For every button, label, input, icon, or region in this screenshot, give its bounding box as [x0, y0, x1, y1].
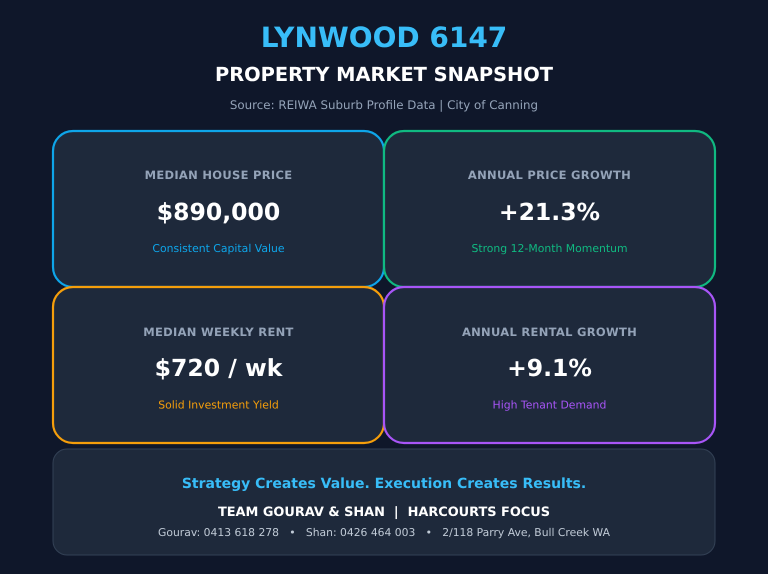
- source note: Source: REIWA Suburb Profile Data | City of Canning: [230, 98, 538, 112]
- panel: annual rental growth: +9.1%: [507, 354, 592, 382]
- panel: median house price: Consistent Capital Value: [152, 242, 285, 255]
- panel: median house price: MEDIAN HOUSE PRICE: [145, 168, 292, 182]
- title: LYNWOOD 6147: [261, 21, 507, 54]
- panel: annual rental growth: ANNUAL RENTAL GROWTH: [462, 325, 637, 339]
- panel: median weekly rent: MEDIAN WEEKLY RENT: [143, 325, 294, 339]
- panel: median weekly rent: $720 / wk: [155, 354, 284, 382]
- subtitle: PROPERTY MARKET SNAPSHOT: [215, 63, 554, 86]
- panel: annual rental growth: [384, 287, 715, 443]
- panel: footer: Strategy Creates Value. Execution Creates Results.: [182, 476, 586, 492]
- panel: annual price growth: +21.3%: [499, 198, 600, 226]
- panel: annual price growth: Strong 12-Month Momentum: [471, 242, 628, 255]
- panel: median house price: [53, 131, 384, 287]
- panel: annual price growth: ANNUAL PRICE GROWTH: [468, 168, 631, 182]
- panel: annual price growth: [384, 131, 715, 287]
- panel: annual rental growth: High Tenant Demand: [493, 398, 606, 412]
- panel: footer: [53, 449, 715, 555]
- panel: footer: TEAM GOURAV & SHAN | HARCOURTS FOCUS: [218, 505, 550, 520]
- panel: footer: Gourav: 0413 618 278 • Shan: 0426 464 003 • 2/118 Parry Ave, Bull Creek WA: [158, 526, 611, 539]
- panel: median house price: $890,000: [157, 198, 280, 226]
- panel: median weekly rent: [53, 287, 384, 443]
- panel: median weekly rent: Solid Investment Yield: [158, 398, 279, 412]
